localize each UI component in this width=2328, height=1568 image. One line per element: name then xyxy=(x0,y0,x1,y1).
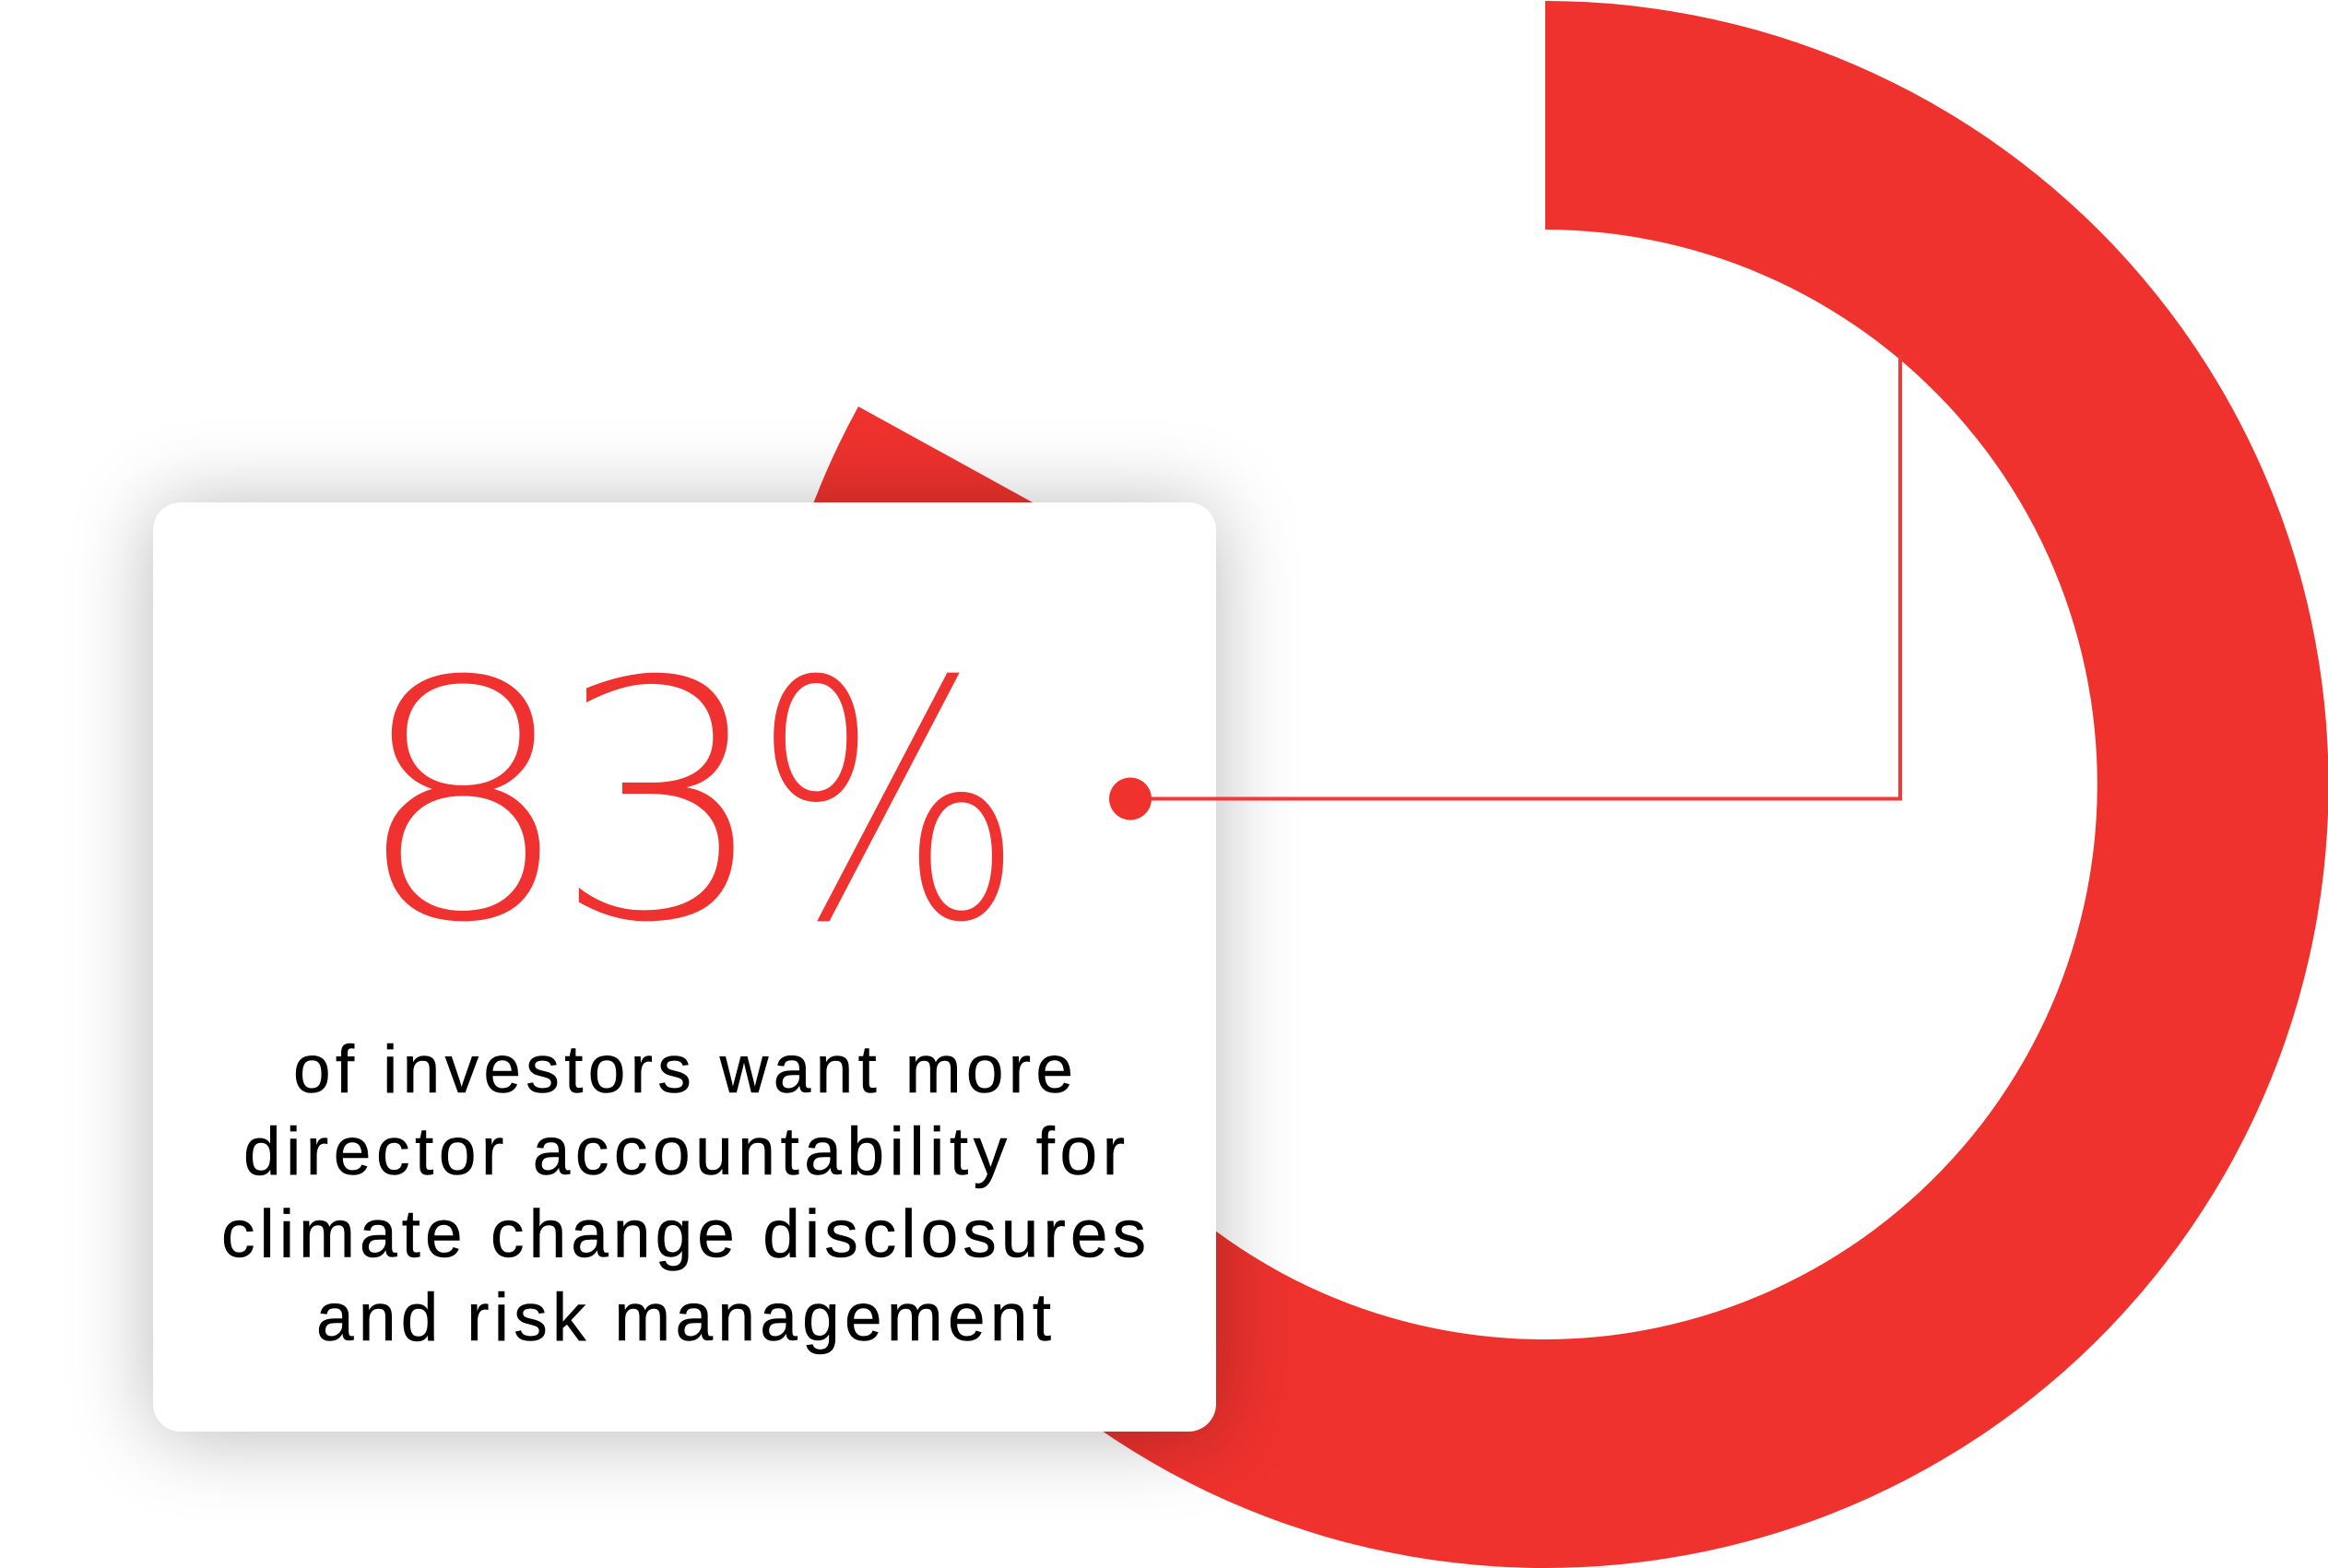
panel: statistic card xyxy=(153,502,1216,1432)
description text xyxy=(221,1032,1146,1355)
description text: climate change disclosures xyxy=(221,1197,1146,1272)
connector line from card to ring xyxy=(1109,355,1900,820)
big number: 83% xyxy=(352,609,1026,996)
big number: 83%: 3 xyxy=(551,609,771,996)
description text: and risk management xyxy=(316,1280,1051,1355)
big number: 83%: % xyxy=(751,610,1026,996)
big number: 83%: 8 xyxy=(352,610,574,996)
description text: of investors want more xyxy=(293,1032,1073,1107)
description text: director accountability for xyxy=(243,1114,1125,1189)
